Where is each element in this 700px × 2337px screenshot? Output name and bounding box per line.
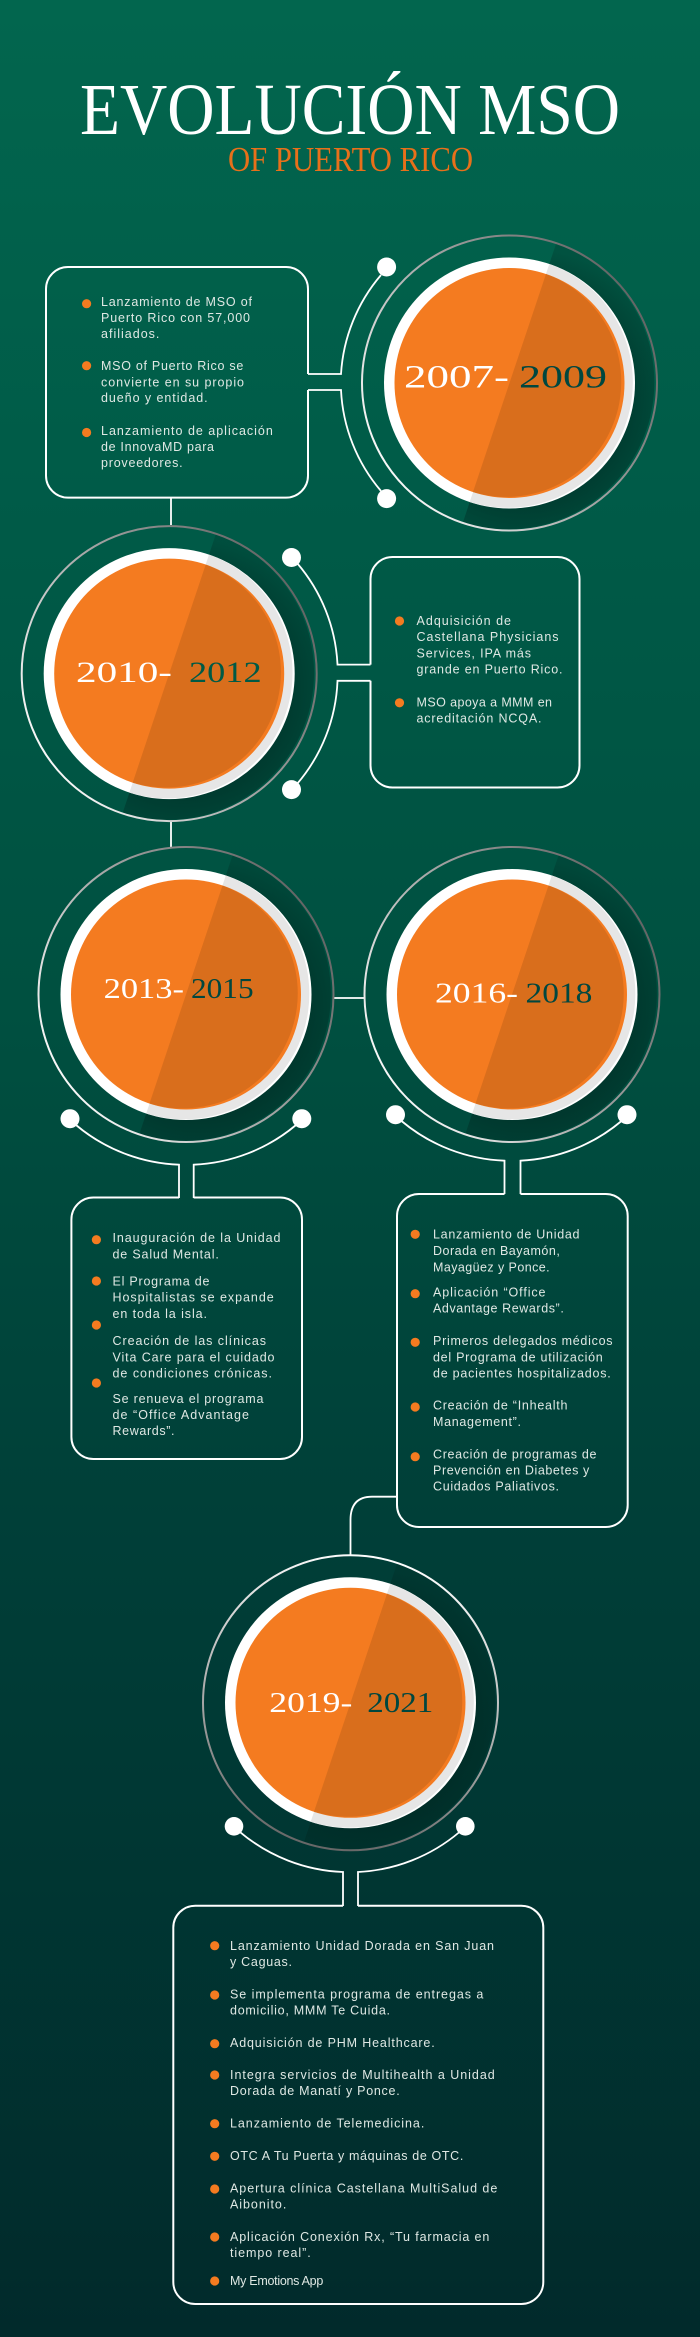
year label: 2019-2021: 2021 xyxy=(367,1688,433,1719)
panel: 2016-2018: Lanzamiento de Unidad xyxy=(433,1228,580,1242)
panel: 2013-2015: Creación de las clínicas xyxy=(112,1334,266,1348)
panel: 2019-2021 xyxy=(173,1906,543,2304)
panel: 2016-2018: Mayagüez y Ponce. xyxy=(433,1260,550,1274)
panel: 2010-2012: MSO apoya a MMM en xyxy=(416,695,552,709)
panel: 2019-2021: Se implementa programa de entregas a xyxy=(230,1988,483,2002)
panel: 2007-2009: Lanzamiento de aplicación xyxy=(101,424,273,438)
year label: 2016-2018: 2016- xyxy=(435,977,518,1009)
panel: 2016-2018: del Programa de utilización xyxy=(433,1350,603,1364)
year label: 2007-2009: 2007- xyxy=(404,359,509,395)
panel: 2013-2015: Inauguración de la Unidad xyxy=(112,1231,280,1245)
year label: 2007-2009: 2009 xyxy=(519,359,607,395)
year label: 2010-2012: 2012 xyxy=(189,656,262,689)
panel: 2019-2021: OTC A Tu Puerta y máquinas de OTC. xyxy=(230,2149,463,2163)
panel: 2007-2009 xyxy=(46,267,308,498)
panel: 2016-2018: Creación de “Inhealth xyxy=(433,1399,567,1413)
panel: 2013-2015: El Programa de xyxy=(112,1275,209,1289)
panel: 2019-2021: Dorada de Manatí y Ponce. xyxy=(230,2084,400,2098)
panel: 2019-2021: Integra servicios de Multihealth a Unidad xyxy=(230,2068,495,2082)
panel: 2007-2009: afiliados. xyxy=(101,327,159,341)
panel: 2016-2018: Prevención en Diabetes y xyxy=(433,1464,590,1478)
panel: 2016-2018: Aplicación “Office xyxy=(433,1286,546,1300)
circle: 2019-2021 xyxy=(203,1555,498,1850)
panel: 2016-2018 xyxy=(397,1194,628,1527)
panel: 2019-2021: Apertura clínica Castellana MultiSalud de xyxy=(230,2181,497,2195)
panel: 2016-2018: de pacientes hospitalizados. xyxy=(433,1366,611,1380)
year label: 2013-2015: 2013- xyxy=(104,973,184,1005)
connector arcs: circle 5 xyxy=(225,1817,475,1906)
year label: 2013-2015 xyxy=(104,973,254,1005)
panel: 2019-2021: tiempo real”. xyxy=(230,2246,311,2260)
panel: 2007-2009: proveedores. xyxy=(101,456,183,470)
panel: 2010-2012: Services, IPA más xyxy=(416,646,531,660)
connector: box 4 to circle 5 xyxy=(350,1497,397,1555)
connector arcs: circle 4 xyxy=(386,1105,636,1194)
panel: 2016-2018: Primeros delegados médicos xyxy=(433,1334,612,1348)
panel: 2016-2018: Cuidados Paliativos. xyxy=(433,1480,559,1494)
panel: 2010-2012: acreditación NCQA. xyxy=(416,712,542,726)
year label: 2019-2021: 2019- xyxy=(269,1688,352,1719)
panel: 2019-2021: Lanzamiento de Telemedicina. xyxy=(230,2117,424,2131)
panel: 2010-2012 xyxy=(370,557,580,788)
panel: 2013-2015: de condiciones crónicas. xyxy=(112,1367,272,1381)
panel: 2007-2009: convierte en su propio xyxy=(101,375,244,389)
connector arcs: circle 2 xyxy=(282,548,370,799)
panel: 2016-2018: Management”. xyxy=(433,1415,521,1429)
panel: 2013-2015 xyxy=(71,1198,302,1459)
panel: 2016-2018: Creación de programas de xyxy=(433,1448,596,1462)
connector: box 1 to circle 2 xyxy=(170,497,172,525)
panel: 2007-2009: Puerto Rico con 57,000 xyxy=(101,311,250,325)
panel: 2019-2021: Adquisición de PHM Healthcare. xyxy=(230,2036,435,2050)
connector: circle 2 to circle 3 xyxy=(170,822,172,847)
year label: 2016-2018 xyxy=(435,977,592,1009)
panel: 2019-2021: domicilio, MMM Te Cuida. xyxy=(230,2004,390,2018)
year label: 2007-2009 xyxy=(404,359,607,395)
circle: 2016-2018 xyxy=(364,847,660,1142)
panel: 2013-2015: Vita Care para el cuidado xyxy=(112,1350,275,1364)
circle: 2010-2012 xyxy=(22,526,317,821)
panel: 2013-2015: Hospitalistas se expande xyxy=(112,1291,274,1305)
year label: 2016-2018: 2018 xyxy=(526,977,592,1009)
title: EVOLUCIÓN MSO xyxy=(80,69,620,150)
circle: 2013-2015 xyxy=(38,847,334,1142)
subtitle: OF PUERTO RICO xyxy=(228,140,473,179)
panel: 2019-2021: y Caguas. xyxy=(230,1955,292,1969)
year label: 2010-2012 xyxy=(76,656,262,689)
year label: 2019-2021 xyxy=(269,1688,433,1719)
year label: 2013-2015: 2015 xyxy=(191,973,254,1005)
panel: 2016-2018: Dorada en Bayamón, xyxy=(433,1244,560,1258)
panel: 2019-2021: Lanzamiento Unidad Dorada en San Juan xyxy=(230,1939,494,1953)
panel: 2013-2015: de “Office Advantage xyxy=(112,1408,249,1422)
panel: 2013-2015: en toda la isla. xyxy=(112,1307,207,1321)
panel: 2007-2009: Lanzamiento de MSO of xyxy=(101,295,253,309)
circle: 2007-2009 xyxy=(362,236,657,530)
connector: circle 3 to circle 4 xyxy=(334,997,364,999)
year label: 2010-2012: 2010- xyxy=(76,656,172,689)
connector arcs: circle 1 xyxy=(308,258,396,508)
panel: 2010-2012: Castellana Physicians xyxy=(416,630,558,644)
panel: 2007-2009: dueño y entidad. xyxy=(101,391,208,405)
panel: 2013-2015: de Salud Mental. xyxy=(112,1247,219,1261)
panel: 2016-2018: Advantage Rewards”. xyxy=(433,1302,564,1316)
panel: 2019-2021: My Emotions App xyxy=(230,2274,323,2288)
panel: 2007-2009: de InnovaMD para xyxy=(101,440,214,454)
panel: 2010-2012: grande en Puerto Rico. xyxy=(416,663,562,677)
connector arcs: circle 3 xyxy=(60,1109,311,1198)
panel: 2010-2012: Adquisición de xyxy=(416,614,511,628)
panel: 2013-2015: Se renueva el programa xyxy=(112,1392,263,1406)
panel: 2013-2015: Rewards”. xyxy=(112,1424,174,1438)
panel: 2019-2021: Aibonito. xyxy=(230,2197,286,2211)
panel: 2019-2021: Aplicación Conexión Rx, “Tu farmacia en xyxy=(230,2230,489,2244)
panel: 2007-2009: MSO of Puerto Rico se xyxy=(101,359,243,373)
